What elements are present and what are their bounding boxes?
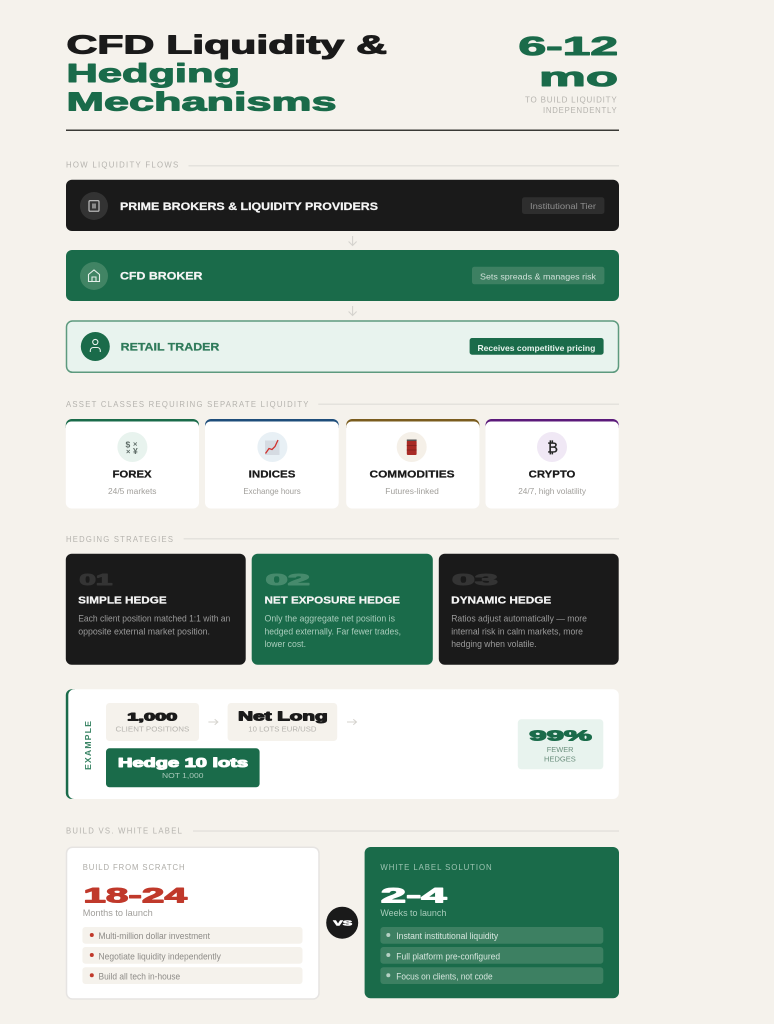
section heading: HEDGING STRATEGIES	[66, 534, 174, 544]
chip: client positions	[106, 703, 199, 741]
flow tier: retail trader: Receives competitive pricing	[478, 343, 595, 353]
panel: white label solution: 2-4	[381, 883, 447, 907]
card: net exposure hedge: Only the aggregate net position is	[264, 614, 395, 624]
panel: white label solution: Weeks to launch	[380, 908, 446, 919]
card: net exposure hedge	[252, 554, 433, 665]
section heading: HOW LIQUIDITY FLOWS	[66, 160, 180, 170]
panel: white label solution	[365, 847, 619, 998]
flow tier: cfd broker	[66, 250, 619, 301]
flow tier: prime brokers	[66, 180, 619, 231]
section heading: ASSET CLASSES REQUIRING SEPARATE LIQUIDITY	[66, 399, 310, 409]
panel: build from scratch: 18-24	[83, 883, 187, 907]
list item: Full platform pre-configured	[396, 951, 500, 961]
card: forex: FOREX	[112, 469, 152, 480]
headline stat: 6-12 months: mo	[539, 62, 618, 92]
list item	[82, 967, 303, 984]
flow tier: prime brokers: PRIME BROKERS & LIQUIDITY PROVIDERS	[120, 201, 378, 213]
icon: person	[90, 339, 100, 352]
card: commodities	[346, 419, 479, 508]
vertical label: EXAMPLE	[84, 720, 93, 770]
card: net exposure hedge: lower cost.	[264, 639, 306, 649]
section: asset classes	[66, 399, 619, 508]
chip: net long: Net Long	[238, 709, 328, 723]
card: forex	[66, 419, 199, 508]
arrow: down	[349, 236, 357, 246]
card: net exposure hedge: NET EXPOSURE HEDGE	[264, 596, 400, 607]
panel: build from scratch: BUILD FROM SCRATCH	[83, 862, 186, 872]
badge: vs	[326, 907, 358, 939]
card: dynamic hedge: internal risk in calm markets, more	[451, 627, 583, 637]
card: indices	[205, 419, 339, 508]
chip: net long	[228, 703, 337, 741]
chip: client positions: CLIENT POSITIONS	[116, 725, 189, 734]
icon: currency exchange	[126, 440, 138, 456]
section: build vs white label	[66, 826, 619, 999]
icon: currency exchange: $	[126, 440, 130, 450]
card: dynamic hedge: 03	[452, 572, 498, 589]
list item: Instant institutional liquidity	[396, 931, 499, 941]
list item: Negotiate liquidity independently	[98, 951, 221, 961]
panel: white label solution: WHITE LABEL SOLUTION	[380, 862, 493, 872]
title: CFD Liquidity &	[66, 30, 387, 60]
arrow: right	[208, 719, 218, 725]
list item	[82, 947, 303, 964]
section heading: BUILD VS. WHITE LABEL	[66, 826, 183, 836]
card: crypto: 24/7, high volatility	[518, 486, 587, 496]
list item: Focus on clients, not code	[396, 972, 493, 982]
headline stat: 6-12 months: 6-12	[518, 31, 618, 61]
list item	[380, 947, 603, 964]
card: crypto	[486, 419, 619, 508]
icon: oil barrel	[407, 440, 417, 455]
icon: currency exchange: ×	[126, 447, 131, 456]
list item	[380, 927, 603, 944]
card: simple hedge: Each client position matched 1:1 with an	[78, 614, 230, 624]
stat: 99% fewer hedges	[518, 719, 603, 769]
arrow: right	[347, 719, 356, 725]
card: indices: INDICES	[249, 469, 296, 480]
card: dynamic hedge: Ratios adjust automatically — more	[451, 614, 587, 624]
flow tier: cfd broker: Sets spreads & manages risk	[480, 271, 597, 281]
section: hedging strategies	[66, 534, 619, 665]
headline stat: 6-12 months: TO BUILD LIQUIDITY	[525, 96, 618, 104]
title: Hedging	[66, 58, 240, 88]
chip: hedge 10 lots	[106, 748, 260, 787]
card: indices: Exchange hours	[243, 486, 301, 496]
flow tier: prime brokers: Institutional Tier	[530, 201, 596, 211]
flow tier: retail trader: RETAIL TRADER	[121, 342, 219, 354]
list item	[82, 927, 303, 944]
card: forex: 24/5 markets	[108, 486, 156, 496]
headline stat: 6-12 months	[518, 31, 618, 115]
card: commodities: COMMODITIES	[370, 469, 455, 480]
card: dynamic hedge: DYNAMIC HEDGE	[451, 596, 552, 607]
stat: 99% fewer hedges: FEWER	[547, 745, 574, 754]
card: net exposure hedge: hedged externally. Far fewer trades,	[264, 627, 401, 637]
card: dynamic hedge: hedging when volatile.	[451, 639, 537, 649]
card: simple hedge: SIMPLE HEDGE	[78, 596, 167, 607]
icon: currency exchange: ×	[133, 440, 138, 448]
icon: document	[89, 201, 99, 211]
chip: client positions: 1,000	[127, 711, 177, 723]
icon: chart	[265, 440, 280, 455]
header	[66, 30, 618, 116]
panel: example	[66, 689, 619, 799]
icon: currency exchange: ¥	[133, 446, 138, 456]
badge: vs: VS	[333, 918, 352, 928]
section: how liquidity flows	[66, 160, 619, 372]
chip: hedge 10 lots: Hedge 10 lots	[118, 756, 248, 770]
stat: 99% fewer hedges: 99%	[529, 727, 592, 744]
panel: build from scratch	[66, 847, 319, 999]
card: simple hedge: 01	[79, 572, 113, 589]
card: simple hedge: opposite external market position.	[78, 627, 210, 637]
icon: bitcoin: ₿	[547, 440, 558, 456]
card: commodities: Futures-linked	[385, 486, 439, 496]
icon: house	[88, 270, 100, 282]
list item	[380, 967, 603, 984]
chip: hedge 10 lots: NOT 1,000	[162, 771, 204, 780]
list item: Multi-million dollar investment	[98, 931, 210, 941]
card: dynamic hedge	[439, 554, 619, 665]
card: net exposure hedge: 02	[266, 572, 310, 589]
title	[66, 30, 387, 116]
flow tier: retail trader	[66, 321, 618, 372]
list item: Build all tech in-house	[98, 972, 180, 982]
chip: net long: 10 LOTS EUR/USD	[248, 725, 317, 734]
stat: 99% fewer hedges: HEDGES	[544, 754, 576, 763]
flow tier: cfd broker: CFD BROKER	[120, 270, 203, 282]
card: crypto: CRYPTO	[529, 469, 576, 480]
panel: build from scratch: Months to launch	[83, 908, 153, 919]
headline stat: 6-12 months: INDEPENDENTLY	[543, 106, 618, 115]
card: simple hedge	[66, 554, 246, 665]
arrow: down	[349, 306, 357, 316]
title: Mechanisms	[66, 86, 336, 116]
